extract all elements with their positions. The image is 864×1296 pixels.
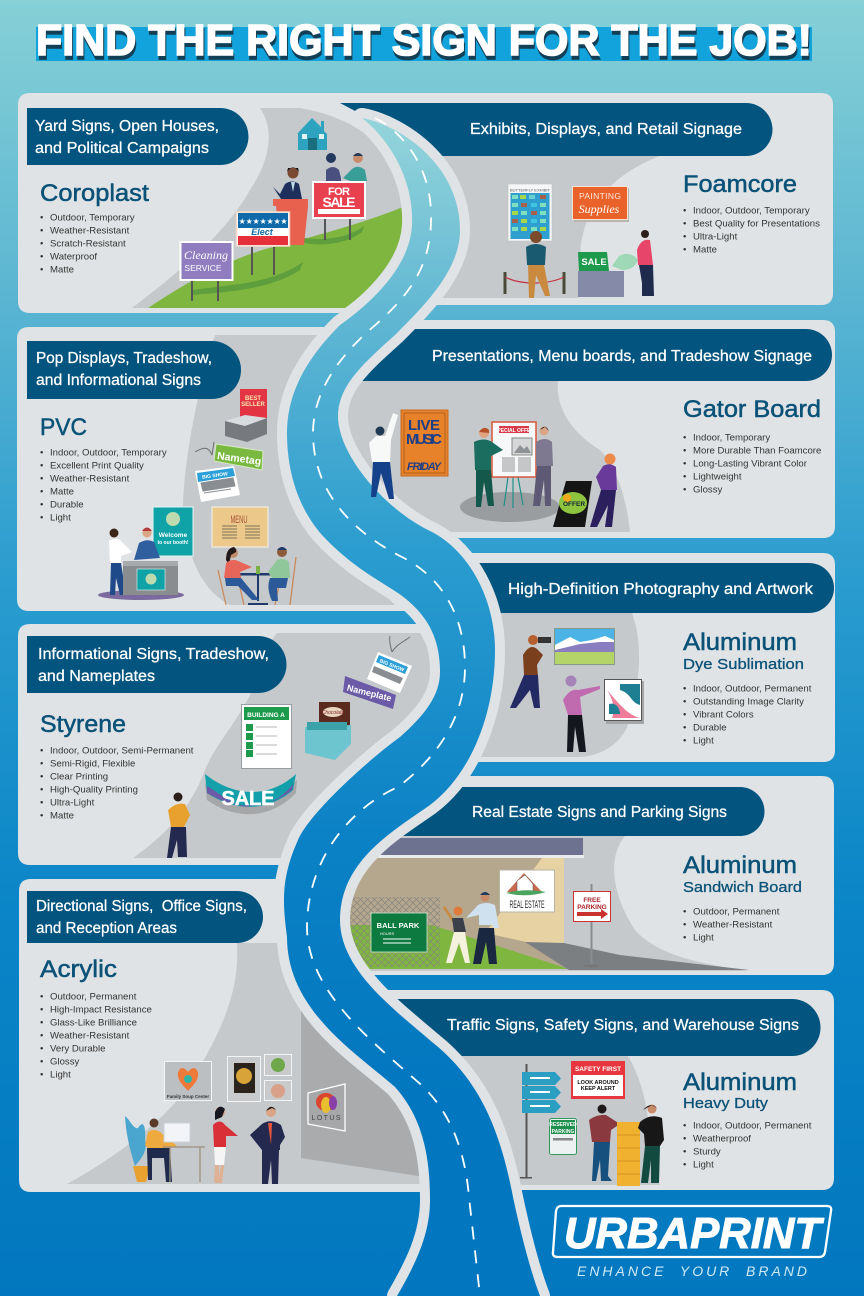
boy with bat — [444, 906, 470, 963]
sign: cleaning service — [180, 242, 232, 301]
header band: aluminum dye sublimation — [455, 563, 834, 613]
display box: chocolate — [305, 702, 351, 760]
scene backdrop: acrylic — [67, 943, 425, 1184]
sign: big show badge: BIG SHOW — [202, 471, 228, 481]
material subtitle: Heavy Duty — [683, 1095, 769, 1112]
header band: aluminum heavy duty — [360, 999, 820, 1056]
feature list: Semi-Rigid, Flexible — [50, 758, 135, 770]
feature list: Weather-Resistant — [50, 474, 130, 484]
feature list: Weather-Resistant — [693, 920, 773, 930]
feature list: • — [40, 512, 43, 524]
scene backdrop: heavy duty — [430, 1056, 660, 1185]
photographer — [510, 635, 551, 708]
feature list: Lightweight — [693, 472, 742, 482]
scene backdrop: foamcore — [420, 156, 660, 298]
panel: pvc — [27, 341, 296, 605]
feature list: Light — [693, 736, 714, 746]
feature list: • — [40, 1070, 43, 1080]
material name: Coroplast — [40, 180, 149, 207]
feature list: Long-Lasting Vibrant Color — [693, 458, 808, 470]
feature list: • — [40, 784, 43, 796]
material subtitle: Sandwich Board — [683, 879, 802, 896]
sign: welcome booth — [153, 507, 193, 556]
poster: butterfly exhibit: BUTTERFLY EXHIBIT — [510, 188, 551, 192]
feature list: • — [683, 232, 686, 242]
material subtitle: Dye Sublimation — [683, 656, 804, 673]
feature list: • — [40, 1030, 43, 1042]
feature list: Excellent Print Quality — [50, 460, 144, 472]
feature list: • — [40, 1018, 43, 1028]
feature list: Scratch-Resistant — [50, 238, 126, 250]
feature list: • — [683, 446, 686, 456]
sale display table — [578, 252, 638, 297]
sign: elect: ★★★★★★★ — [239, 217, 287, 226]
feature list: More Durable Than Foamcore — [693, 446, 821, 456]
easel board: special offer — [492, 422, 536, 508]
poster: live music — [401, 410, 448, 476]
feature list: Matte — [693, 244, 717, 256]
feature list: • — [40, 810, 43, 822]
stacked boxes — [617, 1122, 640, 1186]
feature list: Durable — [693, 722, 727, 734]
sign: painting supplies: Supplies — [579, 202, 620, 216]
sign: lotus — [308, 1084, 345, 1131]
feature list: Weatherproof — [693, 1134, 751, 1144]
sign: nameplate — [343, 676, 396, 709]
feature list: • — [40, 486, 43, 498]
material name: Aluminum — [683, 1069, 797, 1096]
sign: painting supplies: PAINTING — [579, 191, 621, 201]
feature list: • — [683, 458, 686, 470]
heading band — [27, 891, 263, 943]
heading text: Presentations, Menu boards, and Tradeshow Signage — [432, 348, 812, 365]
scene backdrop: aluminum dye sublimation — [455, 613, 639, 757]
feature list: Best Quality for Presentations — [693, 218, 820, 230]
person in orange shirt — [167, 792, 190, 858]
feature list: Light — [693, 1160, 714, 1170]
sign: real estate — [500, 870, 554, 912]
heading band — [27, 108, 248, 165]
sign: family logo — [164, 1062, 212, 1100]
feature list: • — [683, 696, 686, 708]
sign: cleaning service: SERVICE — [184, 263, 222, 273]
heading text: Real Estate Signs and Parking Signs — [472, 804, 727, 821]
sign: safety first: SAFETY FIRST — [575, 1066, 621, 1073]
feature list: • — [40, 474, 43, 484]
feature list: • — [683, 218, 686, 230]
sale display table: SALE — [581, 257, 607, 268]
panel background: pvc — [17, 327, 430, 611]
feature list: • — [683, 920, 686, 930]
feature list: • — [683, 684, 686, 694]
feature list: • — [40, 1056, 43, 1068]
header band: gator board — [350, 329, 832, 381]
feature list: Glossy — [693, 484, 723, 496]
sign: ball park: HOURS — [380, 931, 395, 936]
cafe table scene — [218, 547, 296, 605]
feature list: • — [40, 1004, 43, 1016]
sign: building directory — [242, 704, 292, 768]
feature list: Glass-Like Brilliance — [50, 1018, 137, 1028]
feature list: Outdoor, Temporary — [50, 212, 135, 224]
scene backdrop: gator board — [345, 381, 630, 532]
panel background: styrene — [18, 624, 450, 865]
sign: reserved parking: RESERVED — [549, 1122, 577, 1128]
feature list: Outstanding Image Clarity — [693, 696, 804, 708]
feature list: Matte — [50, 264, 74, 276]
feature list: Vibrant Colors — [693, 710, 754, 720]
panel background: aluminum dye sublimation — [450, 553, 835, 762]
feature list: • — [40, 264, 43, 276]
feature list: • — [683, 1134, 686, 1144]
display box: chocolate: Chocolate — [322, 710, 344, 716]
sign: family logo: Family Soup Center — [167, 1094, 209, 1099]
pop display: best seller: BEST — [245, 396, 261, 402]
sign: menu — [212, 507, 268, 547]
heading text: and Reception Areas — [36, 920, 177, 937]
header band: foamcore — [340, 103, 772, 156]
wires — [390, 636, 410, 652]
poster: live music: LIVE — [408, 417, 440, 434]
scene backdrop: ball park and real estate — [340, 836, 750, 971]
person hanging poster — [369, 413, 398, 499]
panel background: foamcore — [400, 93, 833, 305]
header band: aluminum sandwich board — [380, 787, 764, 836]
feature list: • — [683, 710, 686, 720]
feature list: • — [40, 226, 43, 236]
feature list: Matte — [50, 810, 74, 822]
feature list: Outdoor, Permanent — [50, 992, 137, 1002]
sign: elect — [236, 212, 290, 275]
scene backdrop: pvc — [183, 335, 395, 605]
speaker at podium — [273, 168, 308, 245]
worker in maroon shirt — [589, 1104, 620, 1181]
sign: real estate: REAL ESTATE — [510, 899, 544, 911]
panel: gator board — [369, 348, 821, 527]
feature list: Durable — [50, 500, 84, 510]
feature list: • — [683, 1120, 686, 1132]
sign: reserved parking — [549, 1118, 577, 1154]
material name: Styrene — [40, 711, 126, 738]
reception desk and people — [98, 528, 184, 600]
feature list: • — [683, 932, 686, 944]
panel: aluminum sandwich board — [371, 804, 802, 968]
person in grey suit — [533, 426, 553, 506]
feature list: • — [40, 212, 43, 224]
heading text: Directional Signs, Office Signs, — [36, 898, 247, 915]
panel background: gator board — [320, 320, 835, 538]
sign: nametag: Nametag — [216, 450, 262, 468]
artwork: landscape — [554, 628, 614, 664]
heading text: Exhibits, Displays, and Retail Signage — [470, 121, 742, 138]
logo: urbaprint — [553, 1206, 831, 1279]
feature list: • — [683, 484, 686, 496]
plant and desk worker — [125, 1116, 205, 1182]
feature list: • — [683, 244, 686, 256]
heading text: Yard Signs, Open Houses, — [35, 118, 219, 135]
feature list: Ultra-Light — [50, 798, 95, 808]
material name: Gator Board — [683, 396, 821, 423]
sign: big show badge — [195, 466, 240, 502]
scene backdrop: styrene — [133, 633, 440, 858]
feature list: Outdoor, Permanent — [693, 906, 780, 918]
sign: free parking: PARKING — [577, 904, 607, 911]
feature list: • — [40, 448, 43, 458]
panel: acrylic — [27, 891, 345, 1184]
pop display: best seller: SELLER — [241, 402, 266, 408]
man in green suit — [474, 428, 503, 507]
feature list: • — [40, 798, 43, 808]
sign: for sale: SALE — [322, 194, 356, 210]
feature list: Matte — [50, 486, 74, 498]
feature list: Indoor, Outdoor, Temporary — [50, 448, 167, 458]
easel board: special offer: SPECIAL OFFER — [494, 428, 534, 434]
panel: aluminum dye sublimation — [508, 581, 813, 752]
feature list: Glossy — [50, 1056, 80, 1068]
sign: elect: Elect — [251, 227, 274, 237]
feature list: • — [40, 1044, 43, 1054]
panel: foamcore — [470, 121, 820, 298]
poster: live music: MUSIC — [406, 431, 442, 448]
logo: urbaprint: URBAPRINT — [564, 1209, 824, 1258]
poster: butterfly exhibit — [508, 184, 552, 241]
sign: free parking — [574, 884, 610, 968]
panel background: acrylic — [19, 879, 445, 1192]
heading text: and Informational Signs — [36, 372, 201, 389]
sign: free parking: FREE — [583, 897, 601, 904]
panel background: coroplast — [18, 93, 440, 313]
feature list: Weather-Resistant — [50, 226, 130, 236]
heading text: and Nameplates — [38, 668, 155, 685]
sign: a-frame special offer — [553, 481, 592, 527]
material name: Aluminum — [683, 852, 797, 879]
feature list: Waterproof — [50, 252, 97, 262]
heading text: Traffic Signs, Safety Signs, and Warehouse Signs — [447, 1017, 799, 1034]
two people talking — [326, 153, 367, 181]
feature list: • — [40, 746, 43, 756]
heading band — [27, 341, 241, 399]
woman in purple — [590, 454, 617, 527]
feature list: • — [683, 736, 686, 746]
feature list: Clear Printing — [50, 772, 108, 782]
person in pink top — [637, 230, 654, 296]
panel: aluminum heavy duty — [447, 1017, 812, 1186]
coach — [466, 892, 499, 964]
feature list: Weather-Resistant — [50, 1030, 130, 1042]
feature list: Indoor, Outdoor, Permanent — [693, 684, 812, 694]
feature list: Light — [50, 1070, 71, 1080]
logo: urbaprint: ENHANCE YOUR BRAND — [577, 1263, 807, 1279]
heading text: and Political Campaigns — [35, 140, 209, 157]
sign: cleaning service: Cleaning — [184, 248, 228, 262]
pop display: best seller — [225, 389, 267, 442]
panel: styrene — [27, 636, 412, 858]
wires — [195, 442, 214, 455]
feature list: • — [683, 1146, 686, 1158]
sign: painting supplies — [572, 186, 629, 222]
feature list: • — [40, 758, 43, 770]
feature list: • — [40, 252, 43, 262]
feature list: • — [40, 772, 43, 782]
sign: menu: MENU — [230, 514, 248, 526]
sign: big show: BIG SHOW — [379, 658, 405, 674]
feature list: Sturdy — [693, 1146, 721, 1158]
material name: Foamcore — [683, 171, 797, 198]
sign: safety first — [571, 1061, 625, 1099]
sign: nametag — [214, 444, 263, 470]
panel: coroplast — [27, 108, 367, 301]
feature list: High-Impact Resistance — [50, 1004, 152, 1016]
sign: ball park: BALL PARK — [377, 921, 420, 930]
worker in black shirt — [638, 1104, 664, 1183]
feature list: • — [683, 1160, 686, 1170]
feature list: • — [683, 472, 686, 482]
sign: ball park — [371, 913, 427, 952]
sign: direction arrows — [520, 1064, 561, 1178]
rope barrier — [504, 272, 566, 294]
banner: sale: SALE — [222, 788, 274, 810]
sign: small acrylic tiles — [264, 1054, 292, 1100]
feature list: Indoor, Outdoor, Temporary — [693, 206, 810, 216]
sign: safety first: LOOK AROUND — [577, 1080, 619, 1086]
feature list: Indoor, Outdoor, Semi-Permanent — [50, 746, 194, 756]
banner: sale — [205, 774, 297, 814]
feature list: • — [683, 206, 686, 216]
feature list: Ultra-Light — [693, 232, 738, 242]
heading text: Informational Signs, Tradeshow, — [38, 646, 269, 663]
artwork: abstract — [604, 680, 644, 724]
scene backdrop: coroplast hill — [132, 108, 408, 308]
icon: house — [297, 118, 327, 150]
title: FIND THE RIGHT SIGN FOR THE JOB! — [36, 16, 812, 65]
feature list: • — [683, 432, 686, 444]
poster: live music: FRIDAY — [407, 461, 443, 473]
sign: lotus: LOTUS — [312, 1115, 341, 1122]
person viewing poster — [526, 231, 550, 298]
woman in red and man in suit shaking hands — [213, 1107, 285, 1184]
feature list: • — [683, 722, 686, 734]
panel background: aluminum sandwich board — [320, 776, 834, 975]
sign: welcome booth: to our booth! — [157, 540, 189, 546]
sign: a-frame special offer: OFFER — [563, 501, 585, 508]
woman with hat — [563, 676, 600, 752]
sign: for sale: FOR — [328, 186, 350, 198]
feature list: Very Durable — [50, 1044, 105, 1054]
material name: Acrylic — [40, 956, 117, 983]
material name: Aluminum — [683, 629, 797, 656]
feature list: Indoor, Outdoor, Permanent — [693, 1120, 812, 1132]
feature list: Light — [50, 512, 71, 524]
feature list: • — [40, 238, 43, 250]
sign: nameplate: Nameplate — [346, 683, 393, 703]
sign: reserved parking: PARKING — [552, 1129, 574, 1135]
sign: big show — [367, 652, 412, 693]
feature list: Indoor, Temporary — [693, 432, 770, 444]
sign: for sale — [313, 182, 365, 240]
heading band — [27, 636, 286, 693]
sign: welcome booth: Welcome — [159, 532, 188, 539]
heading text: Pop Displays, Tradeshow, — [36, 350, 212, 367]
material name: PVC — [40, 414, 87, 441]
sign: building directory: BUILDING A — [247, 712, 285, 719]
panel background: aluminum heavy duty — [345, 990, 834, 1190]
sign: art poster — [228, 1056, 260, 1102]
feature list: • — [40, 500, 43, 510]
feature list: • — [40, 992, 43, 1002]
road — [284, 118, 540, 1296]
feature list: • — [683, 906, 686, 918]
feature list: Light — [693, 932, 714, 944]
feature list: • — [40, 460, 43, 472]
feature list: High-Quality Printing — [50, 784, 138, 796]
sign: safety first: KEEP ALERT — [581, 1086, 616, 1092]
heading text: High-Definition Photography and Artwork — [508, 581, 813, 598]
stage shadow — [460, 492, 560, 522]
